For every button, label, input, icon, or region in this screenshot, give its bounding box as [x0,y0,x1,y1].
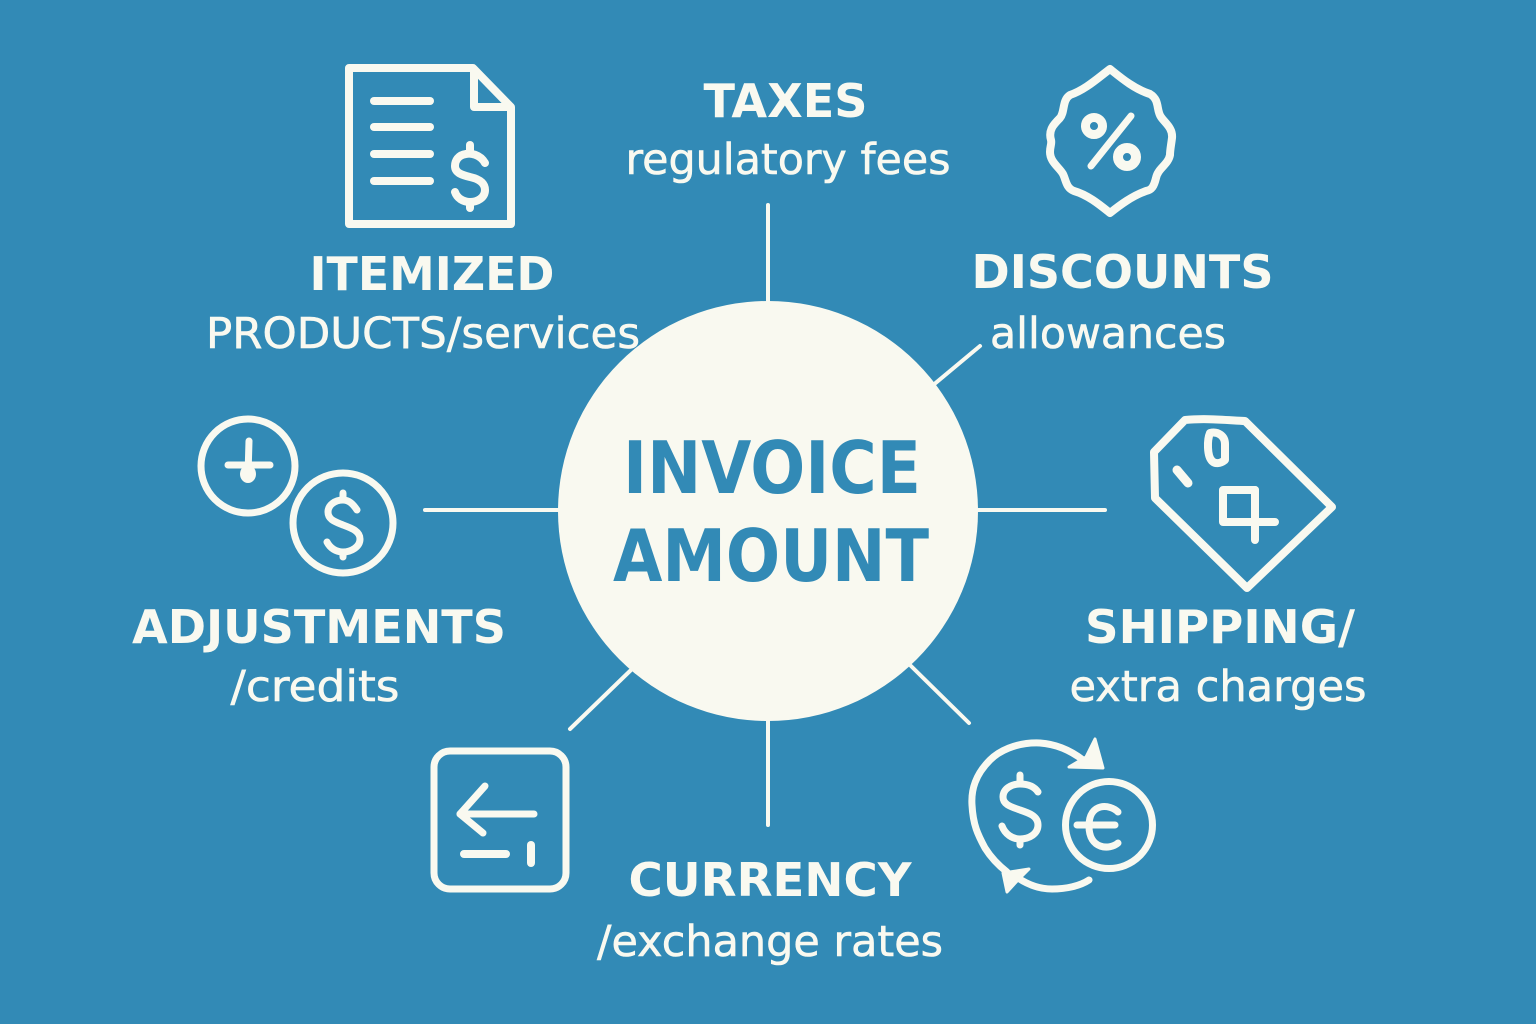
icon: return arrow box [434,751,566,889]
icon: plus and dollar coins [201,419,393,573]
label: discounts [972,245,1274,359]
label: currency: CURRENCY [628,853,912,907]
label: discounts: allowances [990,309,1226,359]
label: discounts: DISCOUNTS [972,245,1274,299]
icon: shipping tag [1154,419,1332,588]
label: taxes: regulatory fees [626,135,950,185]
center circle [558,301,978,721]
label: shipping: extra charges [1070,662,1366,712]
label: shipping: SHIPPING/ [1085,600,1355,654]
center title: AMOUNT [613,514,929,598]
center title [613,426,929,598]
label: currency: /exchange rates [597,917,943,967]
connector lines [425,205,1105,825]
label: itemized [206,247,640,359]
label: taxes: TAXES [704,74,868,128]
center title: INVOICE [623,426,921,510]
label: adjustments [132,600,506,712]
icon: discount badge [1050,69,1172,213]
label: itemized: ITEMIZED [310,247,554,301]
label: adjustments: ADJUSTMENTS [132,600,506,654]
icon: invoice document [349,68,511,224]
label: itemized: PRODUCTS/services [206,309,640,359]
icon: currency exchange [972,739,1152,892]
label: currency [597,853,943,967]
label: adjustments: /credits [230,662,400,712]
label: shipping [1070,600,1366,712]
label: taxes [626,74,950,185]
